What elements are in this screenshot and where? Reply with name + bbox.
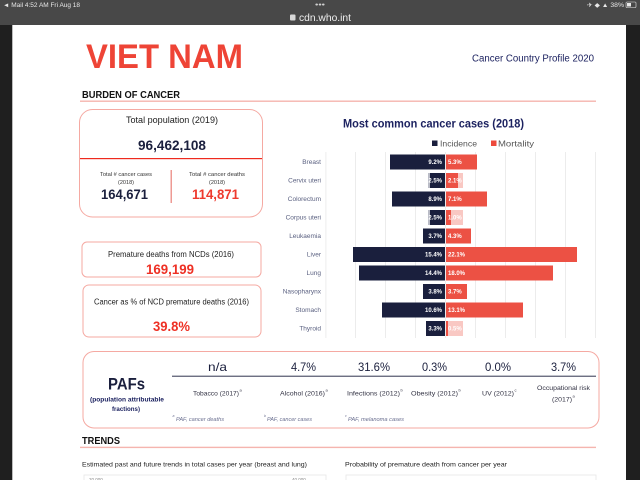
panel: population attributable fractions: a xyxy=(172,414,174,418)
panel: population and totals: Total population (2019) xyxy=(126,115,218,125)
browser bar: cdn.who.int xyxy=(299,12,351,24)
panel: population attributable fractions: Occupational risk xyxy=(537,385,591,392)
bar chart: incidence and mortality by cancer type: Nasopharynx xyxy=(283,288,322,296)
bar chart: incidence and mortality by cancer type: 5.3% xyxy=(448,160,462,166)
bar chart: incidence and mortality by cancer type: 13.1% xyxy=(448,308,466,314)
panel: population attributable fractions: b xyxy=(400,388,404,392)
text: probability of premature death heading: Probability of premature death from cancer per year xyxy=(345,462,508,468)
panel: population attributable fractions: PAF, cancer deaths xyxy=(176,417,224,423)
panel: population attributable fractions: a xyxy=(240,388,242,392)
panel: population and totals: Total # cancer cases xyxy=(100,172,152,178)
bar chart: incidence and mortality by cancer type: 10.6% xyxy=(425,308,443,314)
bar chart: incidence and mortality by cancer type: 3.8% xyxy=(428,290,443,296)
bar chart: incidence and mortality by cancer type: 3.7% xyxy=(428,234,443,240)
panel: population and totals: 114,871 xyxy=(192,187,239,202)
panel: population attributable fractions: 3.7% xyxy=(551,360,576,374)
panel: population and totals xyxy=(80,110,262,217)
panel: cancer as percent of NCD premature deaths xyxy=(83,285,261,337)
bar chart: incidence and mortality by cancer type: Colorectum xyxy=(288,196,321,203)
panel: premature deaths from NCDs: 169,199 xyxy=(146,262,194,277)
bar chart: incidence and mortality by cancer type: Corpus uteri xyxy=(286,214,321,222)
panel: population attributable fractions: PAF, cancer cases xyxy=(267,417,312,423)
bar chart: incidence and mortality by cancer type: 0.5% xyxy=(448,326,462,332)
panel: population and totals: 164,671 xyxy=(101,187,148,202)
panel: cancer as percent of NCD premature deaths: 39.8% xyxy=(153,319,190,334)
panel: population attributable fractions: a xyxy=(572,394,576,398)
panel: population attributable fractions: (2017) xyxy=(552,396,572,404)
chart frame: trends in total cases xyxy=(84,475,326,480)
bar chart: incidence and mortality by cancer type: Stomach xyxy=(295,307,321,314)
bar chart: incidence and mortality by cancer type: Breast xyxy=(302,159,321,166)
panel: population attributable fractions: c xyxy=(345,414,347,418)
panel: population attributable fractions: Infections (2012) xyxy=(347,390,400,398)
subtitle: Cancer Country Profile 2020 xyxy=(472,54,594,64)
panel: population attributable fractions: Tobacco (2017) xyxy=(193,390,239,398)
bar chart: incidence and mortality by cancer type: 14.4% xyxy=(425,271,443,277)
heading: burden of cancer: BURDEN OF CANCER xyxy=(82,90,181,101)
panel: population attributable fractions: Obesity (2012) xyxy=(411,390,458,398)
browser bar: ••• xyxy=(315,2,326,9)
panel: population attributable fractions: PAF, melanoma cases xyxy=(348,417,404,423)
bar chart: incidence and mortality by cancer type: 9.2% xyxy=(428,160,443,166)
panel: population attributable fractions: 4.7% xyxy=(291,360,316,374)
panel: population and totals: (2018) xyxy=(118,180,134,186)
text: trends in total cases heading: Estimated past and future trends in total cases per year (breast and lung) xyxy=(82,462,307,468)
panel: population attributable fractions: (population attributable xyxy=(90,396,164,404)
panel: population attributable fractions: PAFs xyxy=(108,374,145,394)
chart legend xyxy=(432,138,535,148)
bar chart: incidence and mortality by cancer type: Thyroid xyxy=(299,326,321,332)
panel: population attributable fractions: c xyxy=(514,388,516,392)
bar chart: incidence and mortality by cancer type: 15.4% xyxy=(425,252,443,258)
panel: population and totals: Total # cancer deaths xyxy=(189,172,245,178)
chart legend: Incidence xyxy=(440,138,477,148)
panel: population attributable fractions xyxy=(83,352,599,428)
panel: population and totals: 96,462,108 xyxy=(138,138,206,153)
chart frame: probability of premature death xyxy=(346,475,596,480)
bar chart: incidence and mortality by cancer type: 2.1% xyxy=(448,178,462,184)
bar chart: incidence and mortality by cancer type: 3.7% xyxy=(448,290,462,296)
panel: population attributable fractions: 31.6% xyxy=(358,360,390,374)
panel: population attributable fractions: 0.0% xyxy=(485,360,511,374)
panel: population attributable fractions: b xyxy=(458,388,462,392)
browser bar: ◄ Mail 4:52 AM Fri Aug 18 xyxy=(3,3,81,9)
bar chart: incidence and mortality by cancer type: 2.5% xyxy=(428,178,443,184)
bar chart: incidence and mortality by cancer type: 7.1% xyxy=(448,197,462,203)
panel: population attributable fractions: 0.3% xyxy=(422,360,447,374)
bar chart: incidence and mortality by cancer type: Leukaemia xyxy=(289,233,321,240)
bar chart: incidence and mortality by cancer type: 18.0% xyxy=(448,271,466,277)
bar chart: incidence and mortality by cancer type: 3.3% xyxy=(428,326,443,332)
panel: population attributable fractions: Alcohol (2016) xyxy=(280,390,325,398)
panel: premature deaths from NCDs: Premature deaths from NCDs (2016) xyxy=(108,250,234,259)
chart title: Most common cancer cases (2018) xyxy=(343,116,524,130)
chart legend: Mortality xyxy=(498,138,535,148)
bar chart: incidence and mortality by cancer type: 2.5% xyxy=(428,216,443,222)
browser bar xyxy=(0,0,640,25)
bar chart: incidence and mortality by cancer type: 1.0% xyxy=(448,216,462,222)
panel: premature deaths from NCDs xyxy=(82,242,261,277)
panel: population attributable fractions: a xyxy=(326,388,328,392)
bar chart: incidence and mortality by cancer type xyxy=(283,152,596,338)
title: VIET NAM xyxy=(86,38,243,76)
panel: population attributable fractions: UV (2012) xyxy=(482,390,514,398)
panel: population attributable fractions: b xyxy=(264,414,266,418)
bar chart: incidence and mortality by cancer type: Cervix uteri xyxy=(288,178,321,184)
panel: cancer as percent of NCD premature deaths: Cancer as % of NCD premature deaths (2016) xyxy=(94,298,249,306)
bar chart: incidence and mortality by cancer type: Lung xyxy=(307,270,321,277)
bar chart: incidence and mortality by cancer type: Liver xyxy=(307,252,322,258)
panel: population attributable fractions: n/a xyxy=(208,360,227,374)
panel: population attributable fractions: fractions) xyxy=(112,406,140,413)
bar chart: incidence and mortality by cancer type: 22.1% xyxy=(448,252,466,258)
heading: trends: TRENDS xyxy=(82,436,120,447)
bar chart: incidence and mortality by cancer type: 8.9% xyxy=(428,197,443,203)
browser bar: ✈ ◆ ▲ 38% xyxy=(587,2,625,9)
bar chart: incidence and mortality by cancer type: 4.3% xyxy=(448,234,462,240)
panel: population and totals: (2018) xyxy=(209,180,225,186)
